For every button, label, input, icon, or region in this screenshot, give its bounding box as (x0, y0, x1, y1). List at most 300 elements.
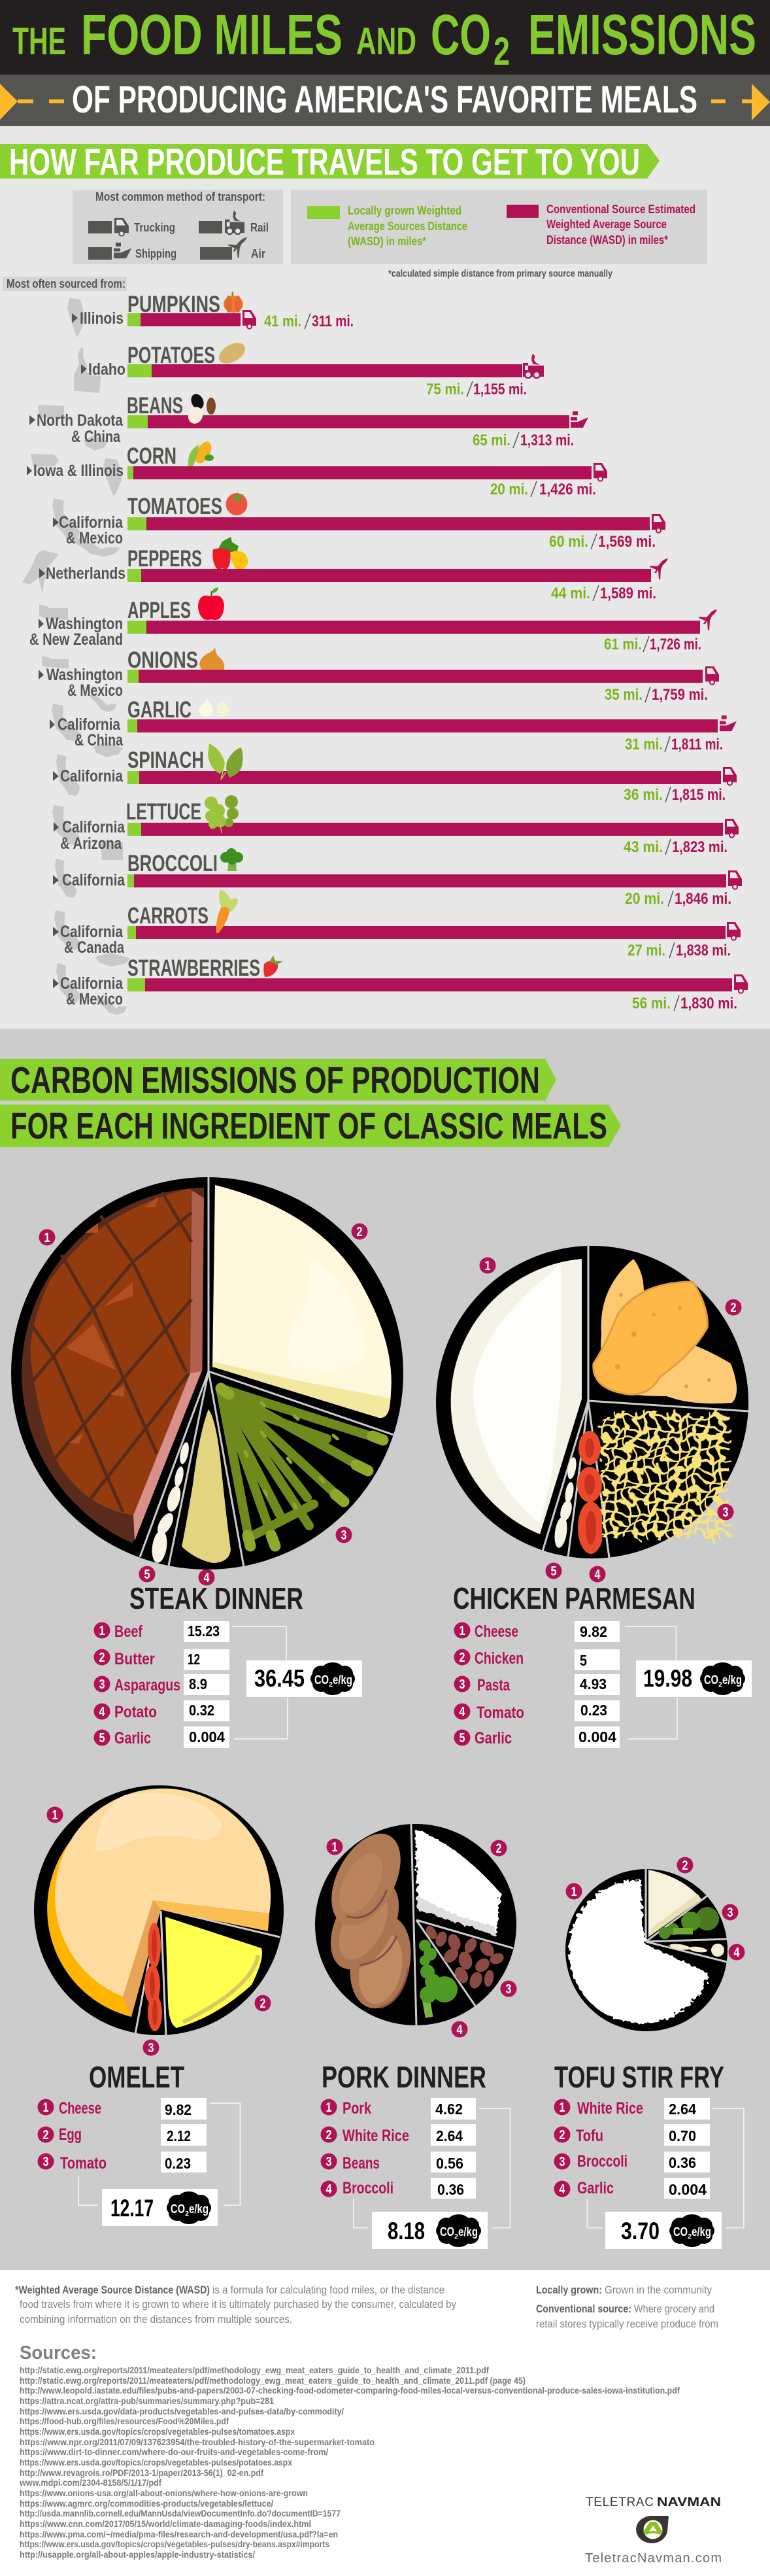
text block: term definitions: Where grocery and (634, 2303, 714, 2315)
source: Washington & Mexico: & Mexico (67, 681, 123, 700)
ingredient: garlic: Garlic (475, 1729, 512, 1747)
total: CO (314, 1674, 329, 1687)
bar (127, 719, 718, 732)
total: e/kg (692, 2225, 711, 2239)
badges: 1 (485, 1259, 490, 1273)
main title: CO (431, 3, 491, 67)
badges: 3 (148, 2041, 154, 2055)
total: 2 (688, 2233, 692, 2241)
source: North Dakota & China (29, 411, 124, 446)
logo: Teletrac Navman: TELETRAC (586, 2496, 654, 2509)
ingredient: broccoli: 4 (326, 2182, 332, 2197)
source: California & China: California (58, 715, 121, 734)
map: California (56, 963, 80, 1003)
miles: 1,846 mi. (675, 890, 731, 908)
icon: apple (198, 587, 224, 620)
label: shipping: Shipping (135, 247, 176, 260)
icon: garlic (199, 697, 231, 718)
title: steak dinner: STEAK DINNER (129, 1581, 303, 1615)
ingredient: cheese (38, 2098, 207, 2120)
miles: 1,759 mi. (652, 686, 708, 704)
list: source urls: https://www.pma.com/~/media/pma-files/research-and-development/usa.pdf?la=en (20, 2530, 338, 2539)
swatch: conventional (507, 205, 539, 218)
ingredient: garlic: Garlic (114, 1729, 151, 1747)
ingredient: cheese (454, 1621, 620, 1642)
ingredient: tomato: Tomato (60, 2154, 107, 2172)
food: garlic (553, 1456, 578, 1549)
map: California (52, 805, 80, 845)
source: California & China (50, 715, 124, 749)
row: broccoli (53, 848, 742, 908)
legend text: local: Locally grown Weighted (348, 204, 461, 217)
ingredient: garlic (94, 1726, 229, 1748)
table: chicken parmesan (454, 1621, 752, 1748)
food: butter (212, 1185, 392, 1418)
miles (624, 838, 728, 856)
total: CO (673, 2225, 688, 2239)
icon: corn (188, 439, 214, 468)
source: Washington & Mexico: Washington (46, 666, 123, 684)
panel: carbon emissions background (0, 1029, 770, 2270)
row: corn (27, 439, 607, 498)
source: California & Canada: California (60, 923, 124, 941)
label: air: Air (251, 247, 265, 260)
ingredient: chicken (454, 1649, 620, 1670)
icon: strawberry (263, 955, 283, 977)
table: steak dinner (94, 1621, 362, 1748)
subtitle band (0, 75, 770, 126)
total: CO (704, 1674, 718, 1687)
ingredient: beans (320, 2152, 476, 2172)
source: North Dakota & China: North Dakota (37, 411, 124, 430)
icon: beans (186, 392, 216, 426)
icon: broccoli (220, 848, 243, 871)
source: California & Mexico (53, 513, 124, 547)
ingredient: asparagus (94, 1674, 229, 1695)
miles: 31 mi. (625, 736, 663, 753)
badges: 5 (144, 1568, 150, 1582)
icon: lettuce (205, 795, 239, 833)
miles (490, 481, 596, 498)
total: 2 (329, 1681, 333, 1689)
miles: 1,823 mi. (672, 838, 728, 856)
icon: plane (650, 558, 668, 579)
total: 2 (718, 1681, 722, 1689)
icon: pumpkin (224, 292, 243, 313)
row: strawberries (53, 955, 748, 1015)
total (605, 2212, 722, 2249)
ingredient: beans: Beans (343, 2154, 380, 2172)
ingredient: beef: 1 (99, 1624, 105, 1638)
row: garlic (50, 697, 737, 757)
left arrow (0, 84, 64, 120)
icon: train (523, 354, 544, 378)
ingredient: white rice: 2 (326, 2128, 332, 2142)
map: Mexico (88, 695, 117, 712)
bar (127, 415, 569, 428)
legend text: conventional: Distance (WASD) in miles* (546, 233, 668, 247)
total (102, 2189, 218, 2226)
ingredient: beef: Beef (114, 1623, 143, 1641)
icon: truck (723, 767, 737, 785)
miles (605, 686, 708, 704)
icon: truck (652, 514, 665, 533)
badges (566, 1857, 745, 1961)
ingredient: garlic: 4 (560, 2182, 565, 2197)
badges: 5 (550, 1564, 557, 1579)
badges: 2 (682, 1859, 688, 1873)
row: carrots (53, 889, 741, 967)
ingredient: tomato: 4 (459, 1705, 465, 1719)
ingredient: white rice: 2.64 (669, 2101, 696, 2118)
row: apples (29, 587, 717, 653)
miles: 311 mi. (312, 313, 354, 330)
text block: WASD definition: *Weighted Average Source Distance (WASD) (15, 2284, 210, 2296)
connector lines (587, 2108, 744, 2227)
ingredient: tomato: 0.23 (580, 1702, 607, 1719)
row: potatoes (74, 339, 544, 398)
ingredient: cheese: Cheese (59, 2099, 101, 2118)
ingredient: tofu (554, 2124, 710, 2146)
icon: potato (215, 339, 249, 368)
badges: 2 (357, 1225, 362, 1239)
map: Washington (42, 656, 69, 668)
panel: food miles background (0, 126, 770, 1029)
ingredient: cheese: Cheese (475, 1623, 518, 1641)
bar (127, 823, 723, 836)
ingredient: beans: 0.56 (436, 2155, 463, 2172)
total (246, 1660, 362, 1697)
badges: 3 (727, 1906, 733, 1920)
map: Mexico (66, 538, 120, 557)
miles: 1,830 mi. (680, 995, 737, 1012)
icon: onion (199, 647, 224, 678)
miles (264, 313, 354, 330)
miles: 1,426 mi. (539, 481, 596, 498)
food: egg (165, 1917, 262, 2028)
name: pumpkins: PUMPKINS (127, 292, 220, 317)
bar (127, 364, 522, 377)
icon: carrot (216, 889, 238, 933)
icon: truck (728, 870, 742, 889)
source: Idaho: Idaho (88, 360, 126, 379)
food: white rice (569, 1880, 709, 2023)
miles: 1,838 mi. (676, 942, 731, 959)
map: Arizona (101, 840, 123, 860)
map: China (84, 436, 108, 451)
food: garlic (669, 1943, 724, 1957)
total: 8.18 (388, 2218, 425, 2244)
title: omelet: OMELET (89, 2060, 184, 2094)
miles: 44 mi. (551, 585, 590, 602)
source: California & Canada (53, 923, 125, 957)
icon: plane (699, 610, 717, 630)
total: 2 (185, 2210, 189, 2218)
legend text: conventional: Weighted Average Source (546, 218, 667, 231)
ingredient: butter (94, 1649, 229, 1670)
food: chicken (594, 1259, 737, 1403)
legend text: local: (WASD) in miles* (348, 235, 426, 248)
ingredient: asparagus: Asparagus (114, 1676, 180, 1694)
source: Washington & New Zealand (29, 615, 123, 649)
ingredient: pork (320, 2098, 476, 2120)
food: pork (316, 1822, 419, 2014)
label: most often sourced from: Most often sourced from: (7, 277, 126, 290)
ingredient: broccoli (554, 2152, 710, 2172)
badges (47, 1806, 271, 2056)
miles (625, 890, 731, 908)
text block: term definitions: Conventional source: (536, 2303, 631, 2315)
icon: tomato (226, 490, 247, 515)
miles (628, 942, 731, 959)
food: broccoli (659, 1907, 719, 1939)
list: source urls: https://www.ers.usda.gov/topics/crops/vegetables-pulses/tomatoes.aspx (20, 2427, 295, 2437)
icon: truck (725, 819, 739, 838)
ingredient: beef (94, 1621, 229, 1642)
icon: truck (705, 666, 719, 685)
bar (127, 771, 721, 784)
title: pork dinner: PORK DINNER (322, 2060, 486, 2094)
ingredient: cheese: 1 (459, 1624, 465, 1638)
map: Mexico (93, 998, 127, 1015)
ingredient: potato: Potato (114, 1703, 157, 1721)
list: source urls: https://www.agmrc.org/commodities-products/vegetables/lettuce/ (20, 2499, 273, 2509)
total: e/kg (189, 2203, 209, 2216)
ingredient: egg: 2.12 (167, 2127, 191, 2144)
miles: 43 mi. (624, 838, 663, 856)
ingredient: broccoli: 3 (560, 2155, 565, 2169)
food: asparagus (221, 1388, 383, 1546)
list: source urls: http://static.ewg.org/reports/2011/meateaters/pdf/methodology_ewg_meat_eaters_guide_to_health_and_climate_2011.pdf (page 45) (20, 2376, 526, 2386)
name: corn: CORN (127, 443, 176, 469)
icon: peppers (212, 537, 248, 571)
name: onions: ONIONS (127, 647, 198, 673)
text block: WASD definition: food travels from where it is grown to where it is ultimately purchased by the consumer, calculated by (20, 2298, 456, 2310)
badges: 3 (723, 1505, 728, 1520)
ingredient: egg (38, 2124, 207, 2146)
miles (549, 533, 656, 551)
ingredient: tomato: 3 (43, 2155, 48, 2169)
food: tofu (648, 1870, 701, 1937)
legend: transport methods: Most common method of transport: (95, 190, 265, 203)
plate: omelet (34, 1785, 284, 2056)
plate: chicken parmesan (436, 1246, 749, 1583)
total: CO (440, 2225, 454, 2239)
list: source urls: https://www.dirt-to-dinner.com/where-do-our-fruits-and-vegetables-come-from/ (20, 2447, 328, 2457)
badges: 4 (204, 1571, 210, 1585)
source: Netherlands: Netherlands (46, 564, 126, 583)
ingredient: broccoli: Broccoli (577, 2152, 628, 2171)
food: cheese (451, 1259, 582, 1534)
badges: 1 (571, 1885, 577, 1899)
name: potatoes: POTATOES (127, 343, 215, 368)
ingredient: pork: 4.62 (435, 2101, 463, 2118)
icon: truck (734, 974, 748, 993)
source: California & Mexico: California (59, 513, 124, 532)
badges: 4 (595, 1568, 601, 1582)
badges (480, 1257, 741, 1583)
miles: 36 mi. (624, 786, 663, 804)
total: 12.17 (110, 2195, 154, 2222)
miles: 1,815 mi. (672, 786, 726, 804)
total: e/kg (458, 2225, 478, 2239)
bar (127, 621, 700, 634)
map: Illinois (103, 458, 122, 496)
ingredient: beans: 3 (326, 2155, 332, 2169)
title: chicken parmesan: CHICKEN PARMESAN (453, 1581, 695, 1615)
header title band (0, 0, 770, 75)
source: Washington & New Zealand: & New Zealand (29, 630, 123, 649)
footnote: calculated distance: *calculated simple distance from primary source manually (388, 268, 613, 279)
total: e/kg (722, 1674, 742, 1687)
list: source urls (19, 2365, 680, 2560)
badges: 1 (52, 1808, 58, 1823)
map: Netherlands (22, 550, 59, 593)
food: garlic (150, 1441, 190, 1564)
food: beans (424, 1924, 505, 1990)
ingredient: cheese: 9.82 (580, 1623, 607, 1640)
table: omelet (38, 2098, 241, 2226)
legend text: conventional (546, 203, 695, 247)
ingredient: garlic (454, 1726, 620, 1748)
source: Washington & Mexico (39, 666, 123, 700)
badges (39, 1223, 367, 1585)
source: California & China: & China (75, 731, 124, 749)
list: source urls: https://food-hub.org/files/resources/Food%20Miles.pdf (20, 2416, 229, 2426)
icon: trucking (88, 218, 129, 236)
main title (12, 3, 756, 73)
row: spinach (53, 744, 737, 804)
ingredient: tofu: 0.70 (669, 2127, 696, 2144)
map: Iowa (31, 454, 59, 467)
bar (127, 517, 650, 530)
bar (127, 569, 651, 582)
total: 19.98 (643, 1665, 692, 1692)
miles (426, 381, 527, 398)
icon: shipping (88, 243, 131, 260)
row: onions (39, 647, 719, 712)
ingredient: chicken: 5 (580, 1652, 587, 1669)
ingredient: garlic: 0.004 (578, 1728, 616, 1745)
source: Illinois: Illinois (80, 309, 124, 328)
table: tofu stir fry (554, 2098, 744, 2249)
miles (473, 432, 574, 449)
badges: 4 (733, 1946, 740, 1960)
ingredient: white rice (554, 2098, 710, 2120)
map: California (56, 754, 80, 796)
ingredient: asparagus: 3 (99, 1677, 105, 1692)
logo: Teletrac Navman (585, 2496, 722, 2566)
list: source urls: http://usda.mannlib.cornell.edu/MannUsda/viewDocumentInfo.do?documentID=1577 (20, 2509, 341, 2518)
bar (127, 926, 726, 939)
miles: 20 mi. (490, 481, 528, 498)
list: source urls: https://www.ers.usda.gov/data-products/vegetables-and-pulses-data/by-commodity/ (20, 2407, 344, 2416)
connector lines (232, 1626, 288, 1739)
badges: 3 (341, 1528, 346, 1543)
ingredient: cheese: 9.82 (165, 2101, 192, 2118)
ingredient: garlic: Garlic (577, 2179, 614, 2197)
ingredient: garlic: 5 (99, 1731, 105, 1745)
icon: spinach (208, 744, 243, 780)
ingredient: chicken: 2 (459, 1651, 465, 1665)
main title: FOOD MILES (81, 3, 343, 67)
total: 36.45 (254, 1665, 305, 1692)
connector lines (625, 1626, 677, 1739)
miles: 75 mi. (426, 381, 464, 398)
list: source urls: http://www.leopold.iastate.edu/files/pubs-and-papers/2003-07-checking-food-odometer-comparing-food-miles-local-versus-conventional-produce-sales-iowa-institution.pdf (20, 2386, 680, 2396)
logo: Teletrac Navman: TeletracNavman.com (585, 2551, 722, 2566)
total: 2 (454, 2233, 458, 2241)
logo: Teletrac Navman: NAVMAN (657, 2496, 721, 2509)
name: carrots: CARROTS (127, 903, 209, 929)
ingredient: egg: Egg (59, 2125, 82, 2144)
label: rail: Rail (250, 221, 269, 234)
ingredient: pork: 1 (326, 2101, 332, 2115)
total (636, 1660, 752, 1697)
food: tomato (577, 1431, 604, 1554)
name: peppers: PEPPERS (127, 546, 202, 572)
bar (127, 978, 732, 991)
ingredient: tomato: 0.23 (165, 2155, 191, 2172)
map: Idaho (74, 348, 101, 393)
ingredient: garlic: 0.004 (669, 2181, 707, 2198)
bar (127, 670, 703, 683)
miles: 20 mi. (625, 890, 664, 908)
list: source urls: https://www.cnn.com/2017/05/15/world/climate-damaging-foods/index.html (20, 2519, 311, 2529)
map: China (93, 742, 123, 757)
ingredient: cheese: 1 (43, 2101, 48, 2115)
list: source urls: http://usapple.org/all-about-apples/apple-industry-statistics/ (20, 2550, 255, 2560)
row: beans (29, 392, 588, 451)
name: lettuce: LETTUCE (126, 799, 201, 825)
legend text: local: Average Sources Distance (348, 220, 467, 233)
badges: 2 (260, 1997, 265, 2011)
map: Canada (95, 953, 130, 967)
heading: sources: Sources: (20, 2343, 97, 2363)
list: source urls: www.mdpi.com/2304-8158/5/1/17/pdf (19, 2478, 161, 2488)
source: California & Mexico: & Mexico (66, 990, 123, 1008)
ingredient: white rice (320, 2124, 476, 2146)
total: 3.70 (621, 2218, 660, 2244)
ingredient: butter: 2 (99, 1651, 105, 1665)
row: lettuce (52, 795, 739, 860)
table: pork dinner (320, 2098, 511, 2249)
ingredient: garlic: 0.004 (189, 1728, 225, 1745)
miles: 41 mi. (264, 313, 301, 330)
legend text: local (348, 204, 467, 248)
ingredient: white rice: White Rice (577, 2099, 643, 2118)
source: Washington & New Zealand: Washington (46, 615, 123, 633)
source: California & Arizona (54, 818, 126, 853)
ingredient: broccoli: 0.36 (669, 2154, 696, 2171)
total (372, 2212, 488, 2249)
ingredient: tofu: 2 (560, 2128, 565, 2142)
icon: ship (571, 411, 588, 428)
swatch: local (307, 206, 340, 219)
ingredient: tofu: Tofu (576, 2127, 603, 2145)
name: spinach: SPINACH (127, 747, 204, 773)
miles: 1,589 mi. (600, 585, 656, 602)
ingredient: white rice: 2.64 (436, 2127, 463, 2144)
list: source urls: https://www.npr.org/2011/07/09/137623954/the-troubled-history-of-the-supermarket-tomato (20, 2437, 375, 2447)
row: peppers (22, 537, 668, 602)
ingredient: pork: Pork (343, 2099, 371, 2118)
plate: steak dinner (11, 1177, 403, 1585)
source: California & Arizona: California (62, 818, 126, 836)
source: California: California (62, 871, 126, 889)
food: white rice (415, 1829, 501, 1936)
badges: 2 (731, 1301, 736, 1315)
